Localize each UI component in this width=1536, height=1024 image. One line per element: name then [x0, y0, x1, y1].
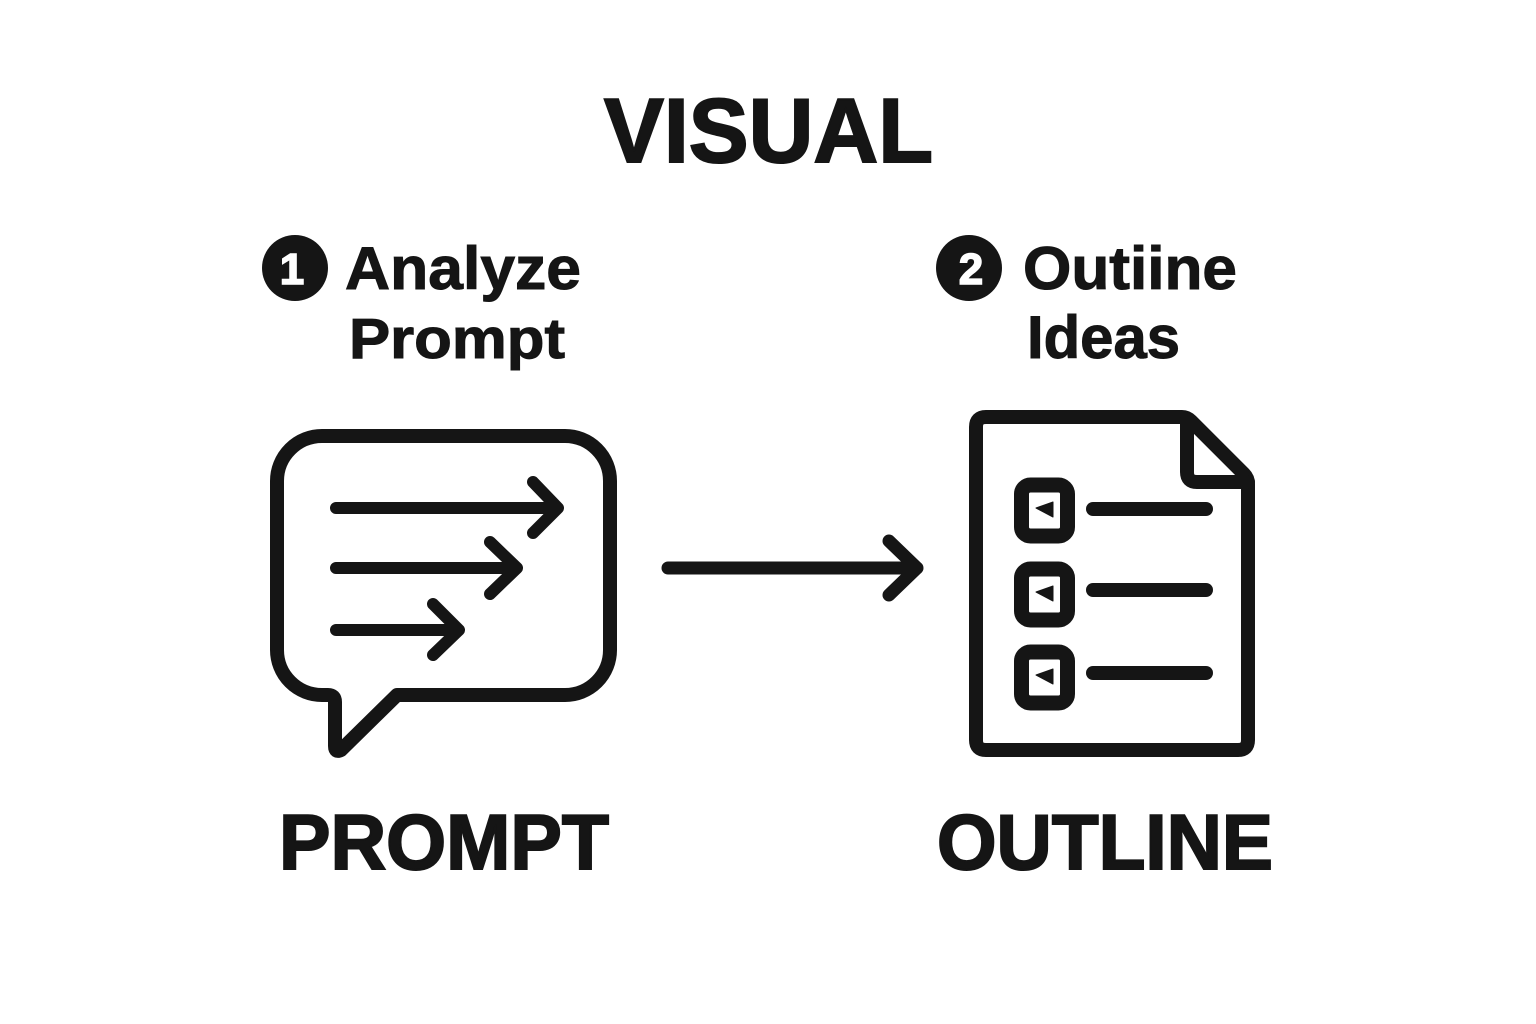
badge: number 2: 2: [959, 245, 983, 294]
step 2 label: [1023, 235, 1237, 371]
step 1 label: [345, 235, 581, 371]
badge: number 1: 1: [280, 245, 304, 294]
step 1 label: Prompt: [349, 307, 565, 371]
label: prompt: PROMPT: [279, 798, 609, 886]
speech bubble outline: [277, 436, 610, 751]
step 2 label: Outiine: [1023, 235, 1237, 302]
badge: number 2: [936, 235, 1002, 301]
icon: speech bubble with arrows: [277, 436, 610, 751]
badge: number 1: [262, 235, 328, 301]
step 2 heading: [936, 235, 1237, 371]
step 1 label: Analyze: [345, 235, 581, 302]
arrow: long: [336, 482, 558, 533]
document outline: [976, 417, 1248, 750]
arrow: prompt to outline: [668, 541, 917, 595]
label: outline: OUTLINE: [937, 798, 1273, 886]
page fold: [1187, 419, 1248, 482]
title: VISUAL: [604, 81, 933, 182]
arrow: medium: [336, 542, 517, 594]
list item 1: [1022, 485, 1206, 536]
step 2 label: Ideas: [1027, 304, 1180, 371]
list item 2: [1022, 569, 1206, 620]
list item 3: [1022, 652, 1206, 703]
arrow: short: [336, 604, 459, 655]
icon: outline document: [976, 417, 1248, 750]
step 1 heading: [262, 235, 581, 371]
